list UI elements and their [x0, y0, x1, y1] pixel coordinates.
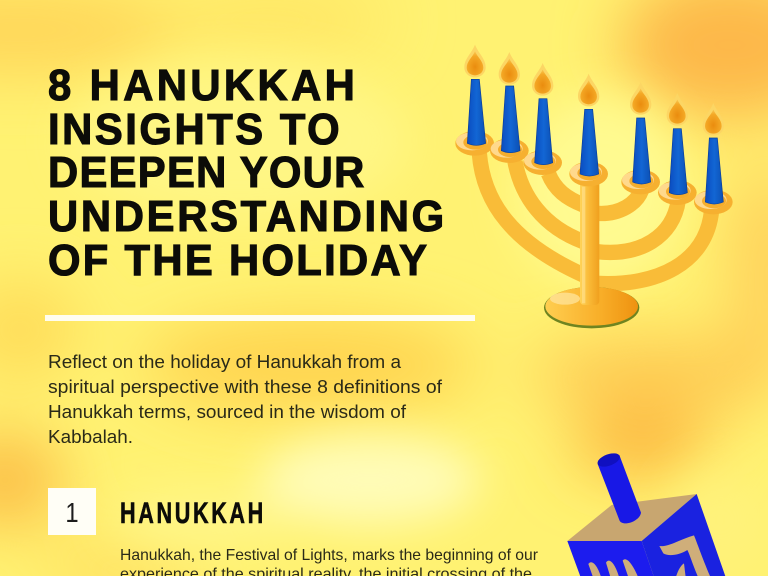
menorah arms	[479, 153, 712, 284]
title: UNDERSTANDING	[48, 192, 444, 241]
section heading: HANUKKAH	[120, 495, 263, 530]
candles	[467, 79, 723, 204]
number badge	[48, 488, 96, 535]
intro paragraph: Kabbalah.	[48, 426, 133, 447]
dreidel right face	[642, 494, 727, 576]
intro paragraph: spiritual perspective with these 8 definitions of	[48, 376, 443, 397]
icon: menorah	[455, 45, 733, 328]
menorah base	[544, 287, 639, 328]
dreidel handle	[598, 455, 641, 523]
title: DEEPEN YOUR	[48, 148, 364, 197]
title: INSIGHTS TO	[48, 105, 340, 154]
title	[48, 61, 444, 285]
candle cups	[455, 131, 494, 156]
section text: Hanukkah, the Festival of Lights, marks the beginning of our	[120, 547, 539, 564]
title divider	[45, 315, 475, 321]
title: OF THE HOLIDAY	[48, 236, 427, 285]
flames	[464, 45, 486, 77]
icon: dreidel	[567, 451, 727, 576]
intro paragraph	[48, 351, 443, 447]
menorah stem	[580, 180, 599, 305]
dreidel left face	[567, 541, 655, 576]
number badge: 1	[65, 496, 79, 528]
intro paragraph: Reflect on the holiday of Hanukkah from a	[48, 351, 402, 372]
section text	[120, 547, 539, 576]
dreidel letters	[588, 535, 712, 576]
title: 8 HANUKKAH	[48, 61, 355, 110]
intro paragraph: Hanukkah terms, sourced in the wisdom of	[48, 401, 407, 422]
dreidel top face	[567, 494, 697, 541]
